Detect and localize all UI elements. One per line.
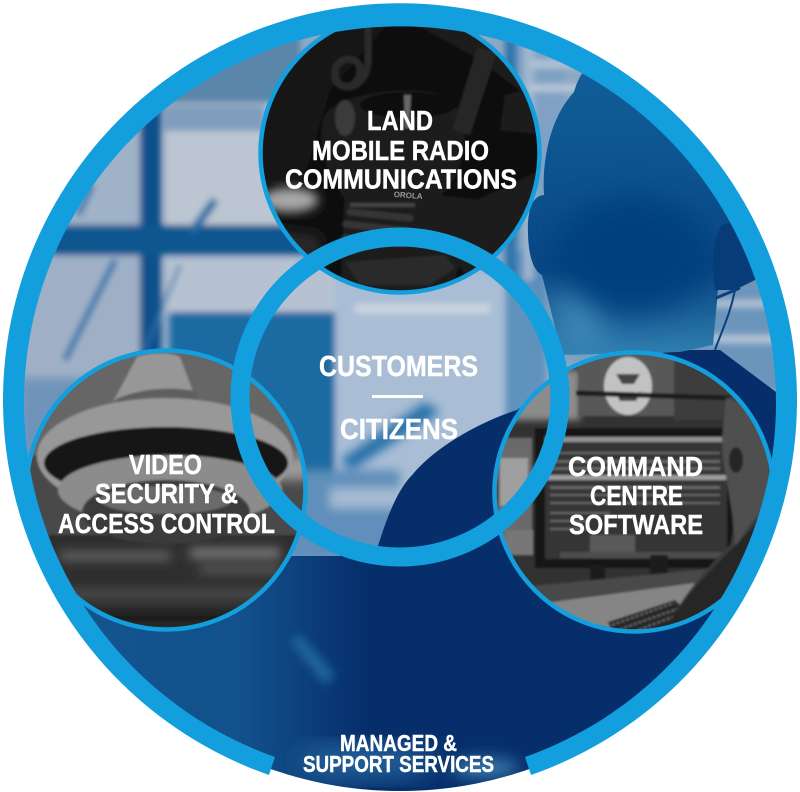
heading: land mobile radio communications [285,105,517,194]
black lens ring [42,426,290,482]
headset [714,223,756,290]
heading: video security and access control: SECURITY & [95,478,238,509]
label: managed and support services [303,730,494,777]
centre text: customers and citizens: CITIZENS [340,414,458,446]
central ring [240,237,560,557]
heading: command centre software: SOFTWARE [569,509,703,540]
left side monitor [498,438,532,548]
operator neck and head [528,74,730,355]
heading: command centre software [568,451,703,540]
heading: land mobile radio communications: LAND [367,105,433,136]
panel: command centre software [490,350,780,640]
camera dome neck [113,353,197,402]
heading: command centre software: COMMAND [568,451,703,482]
wall logo [604,357,652,415]
desk and keyboard [534,569,706,602]
radio top and knobs [321,91,464,205]
camera housing [36,396,294,488]
panel: video security and access control [20,345,310,635]
heading: land mobile radio communications: MOBILE RADIO [312,135,489,166]
heading: video security and access control: ACCESS CONTROL [58,508,275,539]
coiled cable [335,18,368,87]
heading: land mobile radio communications: COMMUNICATIONS [285,164,517,194]
heading: command centre software: CENTRE [590,480,683,511]
heading: video security and access control: VIDEO [129,449,202,480]
centre text: customers and citizens [319,351,478,446]
monitor stands [590,568,605,580]
radio brand: OROLA [393,190,423,201]
inner light ring [56,453,284,514]
radio body [340,194,476,290]
seated person [676,520,757,610]
heading: video security and access control [58,449,275,539]
label: managed and support services: MANAGED & [340,730,457,756]
antenna [452,48,497,135]
lower lens [82,480,250,544]
panel: land mobile radio [255,10,545,300]
label: managed and support services: SUPPORT SERVICES [303,751,494,777]
centre text: customers and citizens: CUSTOMERS [319,351,478,383]
lower blurred foreground [83,556,560,791]
main monitor [535,428,737,568]
operator body [378,350,776,556]
